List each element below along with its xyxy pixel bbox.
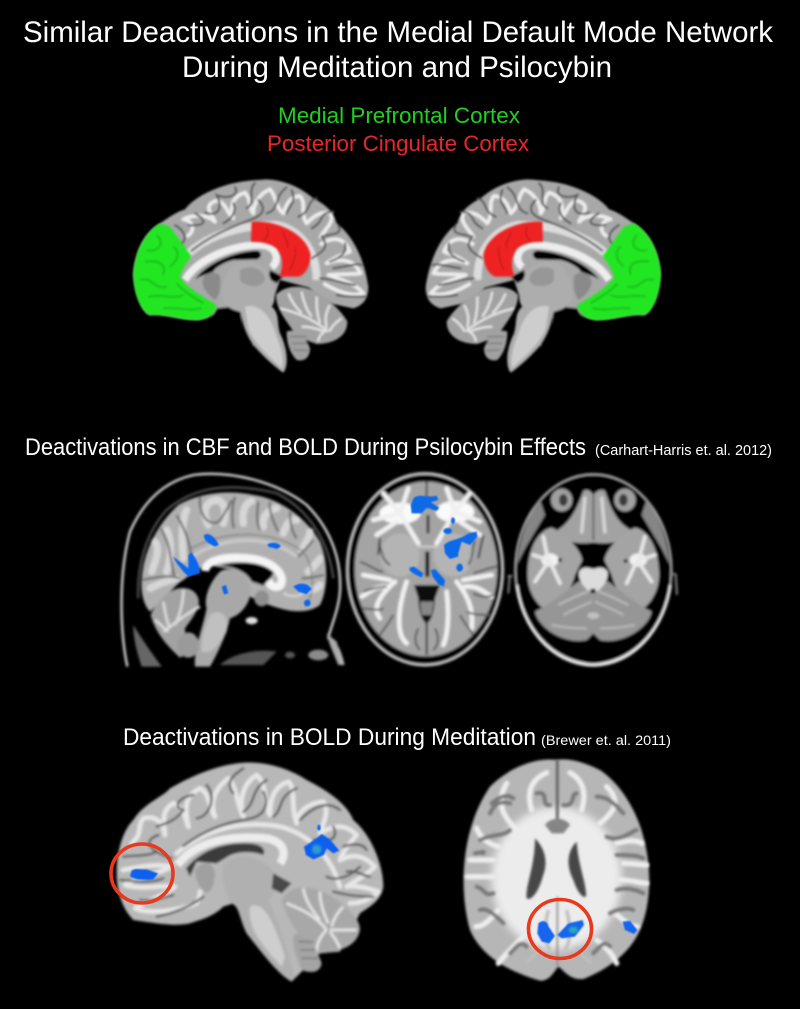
corpus callosum	[177, 837, 284, 865]
brainstem	[579, 568, 608, 593]
red highlight circle: prefrontal	[111, 844, 173, 903]
capsule lines	[418, 545, 437, 549]
region: posterior cingulate cortex	[483, 222, 543, 277]
cerebellum	[282, 888, 360, 953]
lateral ventricles	[526, 838, 546, 899]
gyri light folds	[123, 775, 378, 911]
midline	[424, 482, 429, 508]
heading: meditation section: Deactivations in BOLD During Meditation	[123, 724, 536, 751]
brain: left sagittal view	[133, 179, 368, 373]
legend	[267, 103, 530, 156]
heading: psilocybin section: (Carhart-Harris et. al. 2012)	[595, 442, 772, 459]
corpus callosum	[205, 558, 282, 587]
thalamus and brainstem	[195, 569, 251, 667]
blue activation clusters	[409, 496, 477, 587]
parieto-occipital grey	[525, 910, 592, 963]
title: During Meditation and Psilocybin	[182, 51, 612, 84]
central grey nuclei	[380, 533, 420, 577]
eyes	[551, 489, 572, 511]
legend: Posterior Cingulate Cortex	[267, 131, 530, 156]
title	[23, 16, 774, 84]
panel: psilocybin sagittal scan	[122, 474, 343, 667]
panel: meditation axial scan	[464, 759, 649, 981]
brain	[355, 482, 497, 656]
ears	[508, 573, 677, 595]
panel: psilocybin axial scan, lower slice	[508, 474, 677, 666]
gyri	[467, 773, 647, 963]
cavity	[220, 562, 274, 586]
cerebellum	[535, 582, 652, 641]
ventricle	[186, 843, 264, 877]
panel: brain maps of medial prefrontal and posterior cingulate cortex	[133, 179, 661, 373]
temporal lobes	[528, 528, 582, 612]
cerebellum	[151, 588, 199, 658]
cistern	[580, 548, 607, 564]
panel: meditation sagittal scan	[111, 762, 383, 982]
central white matter	[492, 807, 622, 950]
skull	[122, 474, 343, 667]
cingulate bands	[192, 540, 297, 557]
sulci	[475, 793, 643, 953]
region: posterior cingulate cortex	[251, 222, 311, 277]
skull	[515, 474, 672, 666]
frontal lobes	[558, 490, 631, 543]
sulci	[120, 768, 373, 917]
heading: meditation section: (Brewer et. al. 2011)	[541, 732, 671, 748]
thalamus and brainstem	[223, 856, 295, 982]
cerebrum	[464, 759, 649, 981]
heading: psilocybin section: Deactivations in CBF and BOLD During Psilocybin Effects	[25, 434, 586, 461]
region: medial prefrontal cortex	[133, 223, 217, 320]
cerebrum	[117, 762, 383, 982]
blue activation clusters	[130, 825, 339, 880]
title: Similar Deactivations in the Medial Default Mode Network	[23, 16, 774, 49]
neck tissue	[133, 625, 162, 667]
blue activation clusters	[173, 534, 312, 606]
panel: psilocybin axial scan, upper slice	[347, 473, 503, 665]
posterior cistern	[414, 585, 440, 623]
red highlight circle: posterior	[528, 900, 592, 958]
region: medial prefrontal cortex	[577, 223, 661, 320]
cerebrum	[141, 493, 326, 612]
gyri: light folds	[150, 500, 320, 590]
temporal muscle	[517, 500, 545, 565]
blue activation clusters	[537, 920, 637, 943]
sulci and deep grey matter	[360, 540, 497, 650]
legend: Medial Prefrontal Cortex	[278, 103, 521, 128]
frontal white matter star	[379, 501, 474, 524]
brain: right sagittal view	[426, 179, 661, 373]
skull	[347, 473, 503, 665]
